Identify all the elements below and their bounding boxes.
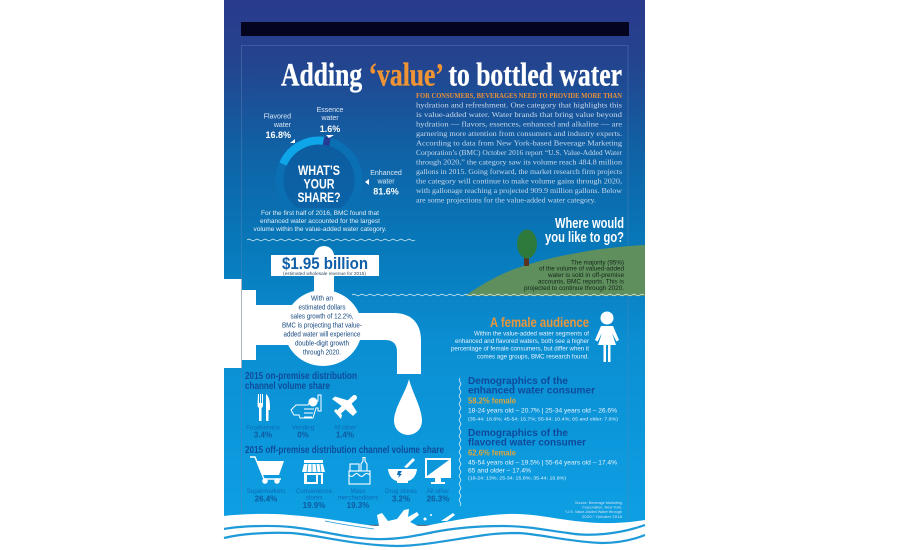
off-premise labels: merchandisers — [338, 494, 378, 502]
intro text: through 2020,” the category saw its volume reach 484.8 million — [416, 158, 622, 166]
icon: shopping cart — [250, 457, 284, 484]
label: essence water — [317, 107, 344, 138]
intro text — [416, 92, 623, 204]
off-premise labels: 26.3% — [427, 494, 449, 504]
water splash — [377, 509, 432, 526]
icon: store — [302, 460, 325, 484]
intro text: the category will continue to make volume gains through 2020, — [416, 176, 622, 186]
female audience text: comes age groups, BMC research found. — [477, 354, 589, 360]
donut caption — [254, 210, 387, 233]
vertical wave divider — [459, 378, 461, 506]
water drop — [394, 379, 422, 435]
source note — [565, 501, 622, 519]
faucet text: through 2020. — [303, 348, 341, 356]
hill text: water is sold in off-premise — [547, 272, 624, 279]
female audience text — [451, 330, 590, 360]
donut caption: volume within the value-added water category. — [254, 226, 387, 233]
female audience text: Within the value-added water segments of — [474, 330, 589, 338]
label: enhanced water: 81.6% — [373, 186, 399, 196]
intro text: with gallonage reaching a projected 909.9 million gallons. Below — [416, 186, 622, 195]
intro text: hydration — flavors, essences, enhanced and alkaline — are — [416, 120, 623, 128]
title: Adding ‘value’ to bottled water — [281, 58, 622, 94]
female audience text: percentage of female consumers, but differ when it — [451, 346, 589, 352]
source note: 2020,” October 2016 — [582, 515, 622, 519]
demographics: flavored: 65 and older – 17.4% — [468, 468, 531, 474]
source note: Source: Beverage Marketing — [575, 501, 622, 505]
on-premise labels: Vending — [292, 424, 315, 432]
faucet text — [282, 294, 363, 356]
demographics: enhanced: 18-24 years old – 20.7% | 25-34 years old – 26.6% — [468, 408, 617, 414]
background panel — [224, 0, 645, 550]
demographics: enhanced: 58.2% female — [468, 396, 516, 406]
icon: woman — [595, 312, 619, 362]
label: essence water: water — [320, 115, 339, 122]
hill with tree — [465, 230, 645, 296]
off-premise labels: Supermarkets — [247, 488, 285, 495]
intro text: gallons in 2015. Going forward, the market research firm projects — [416, 167, 622, 176]
hill text: accounts, BMC reports. This is — [538, 278, 625, 286]
source note: Corporation, New York, — [582, 506, 622, 510]
label: enhanced water: water — [376, 178, 395, 186]
faucet text: sales growth of 12.2%, — [290, 312, 354, 320]
donut chart: what's your share: WHAT’S — [298, 163, 340, 178]
hill text — [524, 260, 625, 292]
on-premise labels: 3.4% — [254, 430, 272, 440]
faucet text: With an — [311, 294, 333, 302]
off-premise labels: All other — [427, 488, 449, 495]
faucet text: double-digit growth — [295, 338, 349, 348]
demographics: enhanced: enhanced water consumer — [468, 386, 595, 396]
off-premise labels: Convenience — [296, 488, 333, 495]
intro text: Corporation’s (BMC) October 2016 report “U.S. Value-Added Water — [416, 148, 622, 157]
off-premise labels: 26.4% — [255, 494, 277, 504]
off-premise labels — [247, 488, 449, 510]
intro text: According to data from New York-based Beverage Marketing — [416, 138, 622, 148]
female audience text: enhanced and flavored waters, both see a higher — [455, 338, 590, 345]
demographics: flavored: 45-54 years old – 19.5% | 55-64 years old – 17.4% — [468, 460, 617, 466]
faucet — [224, 246, 421, 374]
off-premise labels: 3.2% — [392, 494, 410, 504]
off-premise labels: 19.9% — [303, 501, 325, 510]
intro text: garnering more attention from consumers and industry experts. — [416, 129, 622, 138]
demographics: flavored: (18-24: 13%; 25-34: 15.8%; 35-44: 16.9%) — [468, 476, 566, 482]
donut caption: enhanced water accounted for the largest — [260, 218, 380, 225]
heading: on-premise — [245, 371, 357, 392]
bottom waves — [224, 513, 645, 550]
black banner — [241, 22, 629, 36]
on-premise labels: 0% — [297, 430, 309, 440]
faucet text: added water will experience — [284, 330, 360, 338]
icon: plane — [332, 396, 357, 419]
icon: mortar and pestle — [388, 458, 417, 483]
faucet text: BMC is projecting that value- — [282, 320, 363, 330]
hill text: of the volume of valued-added — [539, 266, 624, 272]
donut caption: For the first half of 2016, BMC found that — [261, 210, 379, 217]
wave divider — [247, 239, 415, 241]
label: flavored water — [264, 114, 295, 143]
label: flavored water: water — [273, 122, 292, 129]
revenue label: (estimated wholesale revenue for 2015) — [283, 271, 366, 277]
icon: mass merchandisers — [349, 458, 370, 484]
heading: on-premise: channel volume share — [245, 381, 330, 392]
intro text: FOR CONSUMERS, BEVERAGES NEED TO PROVIDE MORE THAN — [416, 92, 622, 100]
wave divider right — [352, 294, 644, 296]
heading: off-premise: 2015 off-premise distribution channel volume share — [245, 445, 444, 456]
label: essence water: Essence — [317, 107, 344, 114]
heading: a female audience: A female audience — [490, 314, 589, 330]
inner frame — [242, 46, 628, 526]
revenue label: $1.95 billion — [282, 254, 368, 273]
heading: where would you like to go: Where would — [555, 216, 624, 232]
source note: “U.S. Value-Added Water through — [565, 510, 622, 514]
on-premise labels: 1.4% — [336, 430, 354, 440]
icon: monitor — [426, 459, 450, 484]
heading: where would you like to go: you like to go? — [545, 230, 624, 246]
off-premise labels: stores — [306, 494, 322, 502]
donut chart: what's your share: YOUR — [304, 176, 335, 192]
icon: vending — [291, 395, 321, 418]
label: enhanced water — [365, 170, 402, 196]
faucet text: estimated dollars — [298, 302, 346, 312]
intro text: is value-added water. Water brands that bring value beyond — [416, 110, 622, 119]
off-premise labels: 19.3% — [347, 501, 369, 510]
heading: where would you like to go — [545, 216, 624, 246]
label: flavored water: 16.8% — [265, 130, 291, 140]
demographics: enhanced: (35-44: 18.6%; 45-54: 15.7%; 55-64: 10.4%; 65 and older: 7.9%) — [468, 417, 618, 423]
demographics: flavored — [468, 428, 617, 482]
on-premise labels: Foodservice — [246, 424, 280, 432]
intro text: hydration and refreshment. One category that highlights this — [416, 100, 622, 110]
on-premise labels: All other — [334, 424, 356, 432]
off-premise labels: Drug stores — [385, 488, 417, 495]
demographics: enhanced: Demographics of the — [468, 376, 568, 387]
demographics: flavored: 62.6% female — [468, 448, 516, 458]
label: flavored water: Flavored — [264, 114, 291, 120]
donut chart: what's your share: SHARE? — [298, 190, 340, 205]
intro text: are some projections for the value-added water category. — [416, 196, 596, 204]
infographic — [224, 0, 646, 548]
demographics: flavored: flavored water consumer — [468, 438, 586, 448]
demographics: flavored: Demographics of the — [468, 428, 568, 439]
hill text: projected to continue through 2020. — [524, 285, 624, 292]
on-premise labels — [246, 424, 356, 440]
label: enhanced water: Enhanced — [370, 170, 402, 177]
demographics: enhanced — [468, 376, 618, 423]
heading: on-premise: 2015 on-premise distribution — [245, 371, 357, 382]
donut chart: what's your share — [280, 140, 358, 220]
hill text: The majority (95%) — [571, 260, 624, 266]
icon: fork and knife — [258, 394, 270, 421]
label: essence water: 1.6% — [320, 124, 340, 134]
off-premise labels: Mass — [351, 488, 365, 495]
